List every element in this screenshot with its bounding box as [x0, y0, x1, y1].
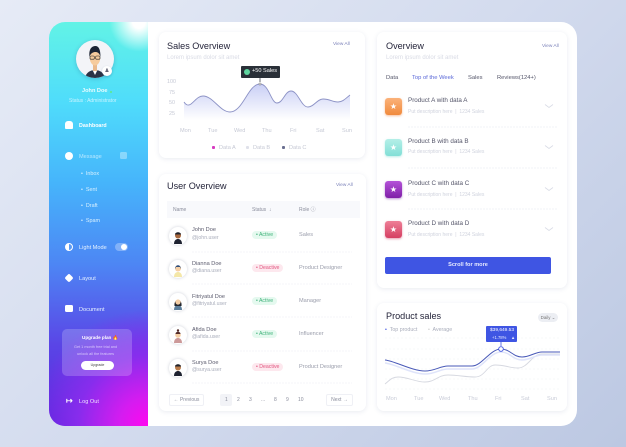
legend: sales: Data C [289, 144, 306, 150]
current page [220, 394, 232, 406]
avatar: afida [169, 326, 187, 344]
nav: message: Message [79, 154, 102, 160]
tab: data: Data [386, 75, 398, 81]
icon: product a [385, 98, 402, 115]
role: fitriyatul: Manager [299, 298, 321, 304]
button: previous: ← Previous [174, 397, 199, 403]
sales heading: Sales Overview [167, 41, 230, 51]
column: role: Role ⓘ [299, 207, 316, 213]
sales subtitle: Lorem ipsum dolor sit amet [167, 55, 239, 61]
tooltip change text: +1.78% ▲ [492, 334, 515, 340]
status: afida: • Active [256, 331, 273, 337]
handle: dianna: @diana.user [192, 268, 222, 274]
tab: sales: Sales [468, 75, 483, 81]
tooltip text: +50 Sales [252, 68, 277, 74]
icon: product d [385, 221, 402, 238]
toggle switch [115, 243, 128, 251]
line chart: sales: Sat [316, 128, 325, 134]
sidebar background [49, 22, 148, 426]
line chart: sales: 100 [167, 79, 176, 85]
line chart: sales: 50 [169, 100, 175, 106]
avatar: surya [169, 359, 187, 377]
upgrade button [81, 361, 114, 370]
user heading: User Overview [167, 181, 227, 191]
legend: average: • Average [428, 327, 452, 333]
avatar badge [102, 66, 112, 76]
name: surya: Surya Doe [192, 360, 218, 366]
column: status: Status ↓ [252, 207, 271, 213]
profile status: Status : Administrator [69, 98, 117, 104]
avatar: dianna [169, 260, 187, 278]
status: surya: • Deactive [256, 364, 279, 370]
avatar: fitriyatul [169, 293, 187, 311]
line chart: sales: Thu [262, 128, 272, 134]
icon: layout [64, 273, 74, 283]
product sales heading: Product sales [386, 311, 441, 321]
role: afida: Influencer [299, 331, 324, 337]
line chart: sales: Wed [234, 128, 245, 134]
nav: log out: Log Out [79, 399, 99, 405]
status: dianna [252, 264, 283, 272]
product b description: Put description here | 1234 Sales [408, 149, 484, 155]
line chart: sales [167, 78, 352, 134]
top glow [109, 0, 169, 52]
name: dianna: Dianna Doe [192, 261, 222, 267]
nav: layout: Layout [79, 276, 96, 282]
user view all: View All [336, 183, 353, 188]
pagination: 3 [249, 397, 252, 403]
tab: reviews: Reviews(124+) [497, 75, 536, 81]
panel: sales overview [159, 32, 365, 158]
pagination: 8 [274, 397, 277, 403]
online dot [110, 91, 112, 93]
upgrade text: unlock all the features [77, 352, 114, 356]
role: dianna: Product Designer [299, 265, 342, 271]
legend: sales [212, 144, 306, 150]
handle: surya: @surya.user [192, 367, 221, 373]
icon: light mode [65, 243, 73, 251]
status: fitriyatul: • Active [256, 298, 273, 304]
upgrade button: Upgrade [91, 363, 104, 367]
tooltip: +50 sales [241, 66, 280, 78]
product c title: Product C with data C [408, 180, 469, 187]
button: next [326, 394, 353, 406]
pagination: 2 [237, 397, 240, 403]
legend: top product: • Top product [385, 327, 417, 333]
row dividers [192, 252, 352, 384]
role: john: Sales [299, 232, 313, 238]
table header [167, 201, 360, 218]
line chart: product sales: Wed [439, 396, 450, 402]
submenu: draft: • Draft [81, 203, 98, 209]
line chart: product sales [384, 342, 560, 402]
pagination: ... [261, 397, 265, 403]
upgrade text: Get 1 month free trial and [74, 345, 117, 349]
role: surya: Product Designer [299, 364, 342, 370]
tooltip icon [244, 69, 250, 75]
nav: dashboard: Dashboard [79, 123, 107, 129]
column: name: Name [173, 207, 186, 213]
dividers and chevrons [408, 104, 557, 231]
daily dropdown: Daily ⌄ [541, 315, 555, 320]
status: john [252, 231, 277, 239]
tab: top of the week: Top of the Week [412, 75, 454, 81]
handle: john: @john.user [192, 235, 219, 241]
legend: sales: Data A [219, 144, 236, 150]
status: surya [252, 363, 283, 371]
pagination: 9 [286, 397, 289, 403]
line chart: sales: Fri [290, 128, 297, 134]
pagination: 10 [298, 397, 304, 403]
status: dianna: • Deactive [256, 265, 279, 271]
status: fitriyatul [252, 297, 277, 305]
icon: document [65, 305, 73, 312]
button: scroll for more [385, 257, 551, 274]
status: john: • Active [256, 232, 273, 238]
panel: user overview [159, 174, 366, 411]
tooltip: price [486, 326, 517, 342]
submenu: inbox: • Inbox [81, 171, 99, 177]
button: scroll for more: Scroll for more [448, 262, 488, 268]
product d title: Product D with data D [408, 220, 469, 227]
pagination: 1 [225, 397, 228, 403]
message badge [120, 152, 127, 159]
line chart: product sales: Sun [547, 396, 557, 402]
submenu: sent: • Sent [81, 187, 97, 193]
handle: afida: @afida.user [192, 334, 220, 340]
sales view all: View All [333, 42, 350, 47]
overview subtitle: Lorem ipsum dolor sit amet [386, 55, 458, 61]
line chart: product sales: Sat [521, 396, 530, 402]
nav: light mode: Light Mode [79, 245, 107, 251]
product c description: Put description here | 1234 Sales [408, 192, 484, 198]
profile name: John Doe [82, 88, 107, 94]
line chart: product sales: Mon [386, 396, 397, 402]
panel: overview [377, 32, 567, 288]
icon: product d: ★ [390, 225, 397, 234]
avatar: john [169, 227, 187, 245]
line chart: sales: Sun [342, 128, 352, 134]
overview heading: Overview [386, 41, 424, 51]
nav: document: Document [79, 307, 104, 313]
button: previous [169, 394, 204, 406]
line chart: product sales: Tue [414, 396, 423, 402]
handle: fitriyatul: @fitriyatul.user [192, 301, 227, 307]
button: next: Next → [331, 397, 348, 403]
icon: message [65, 152, 73, 160]
overview view all: View All [542, 44, 559, 49]
panel: product sales [377, 303, 567, 411]
line chart: product sales: Fri [495, 396, 502, 402]
legend: sales: Data B [253, 144, 270, 150]
icon: product a: ★ [390, 102, 397, 111]
product a title: Product A with data A [408, 97, 468, 104]
product b title: Product B with data B [408, 138, 469, 145]
icon: log out: ↦ [66, 396, 73, 405]
avatar badge: ♟ [105, 68, 109, 74]
line chart: sales: 75 [169, 90, 175, 96]
profile avatar [76, 40, 114, 78]
tooltip price text: $39,649.53 [490, 328, 514, 332]
product a description: Put description here | 1234 Sales [408, 109, 484, 115]
line chart: sales: 25 [169, 111, 175, 117]
upgrade text [74, 345, 117, 356]
daily dropdown [538, 313, 558, 322]
upgrade panel [62, 329, 132, 376]
pagination [220, 394, 304, 406]
name: john: John Doe [192, 227, 216, 233]
line chart: sales: Tue [208, 128, 217, 134]
name: fitriyatul: Fitriyatul Doe [192, 294, 225, 300]
icon: dashboard [65, 121, 73, 129]
line chart: product sales: Thu [468, 396, 478, 402]
upgrade heading: Upgrade plan 🔥 [82, 335, 118, 340]
icon: product b: ★ [390, 143, 397, 152]
product d description: Put description here | 1234 Sales [408, 232, 484, 238]
dashboard window [49, 22, 577, 426]
submenu: spam: • Spam [81, 218, 100, 224]
name: afida: Afida Doe [192, 327, 217, 333]
line chart: sales: Mon [180, 128, 191, 134]
status: afida [252, 330, 277, 338]
icon: product c: ★ [390, 185, 397, 194]
icon: product b [385, 139, 402, 156]
icon: product c [385, 181, 402, 198]
